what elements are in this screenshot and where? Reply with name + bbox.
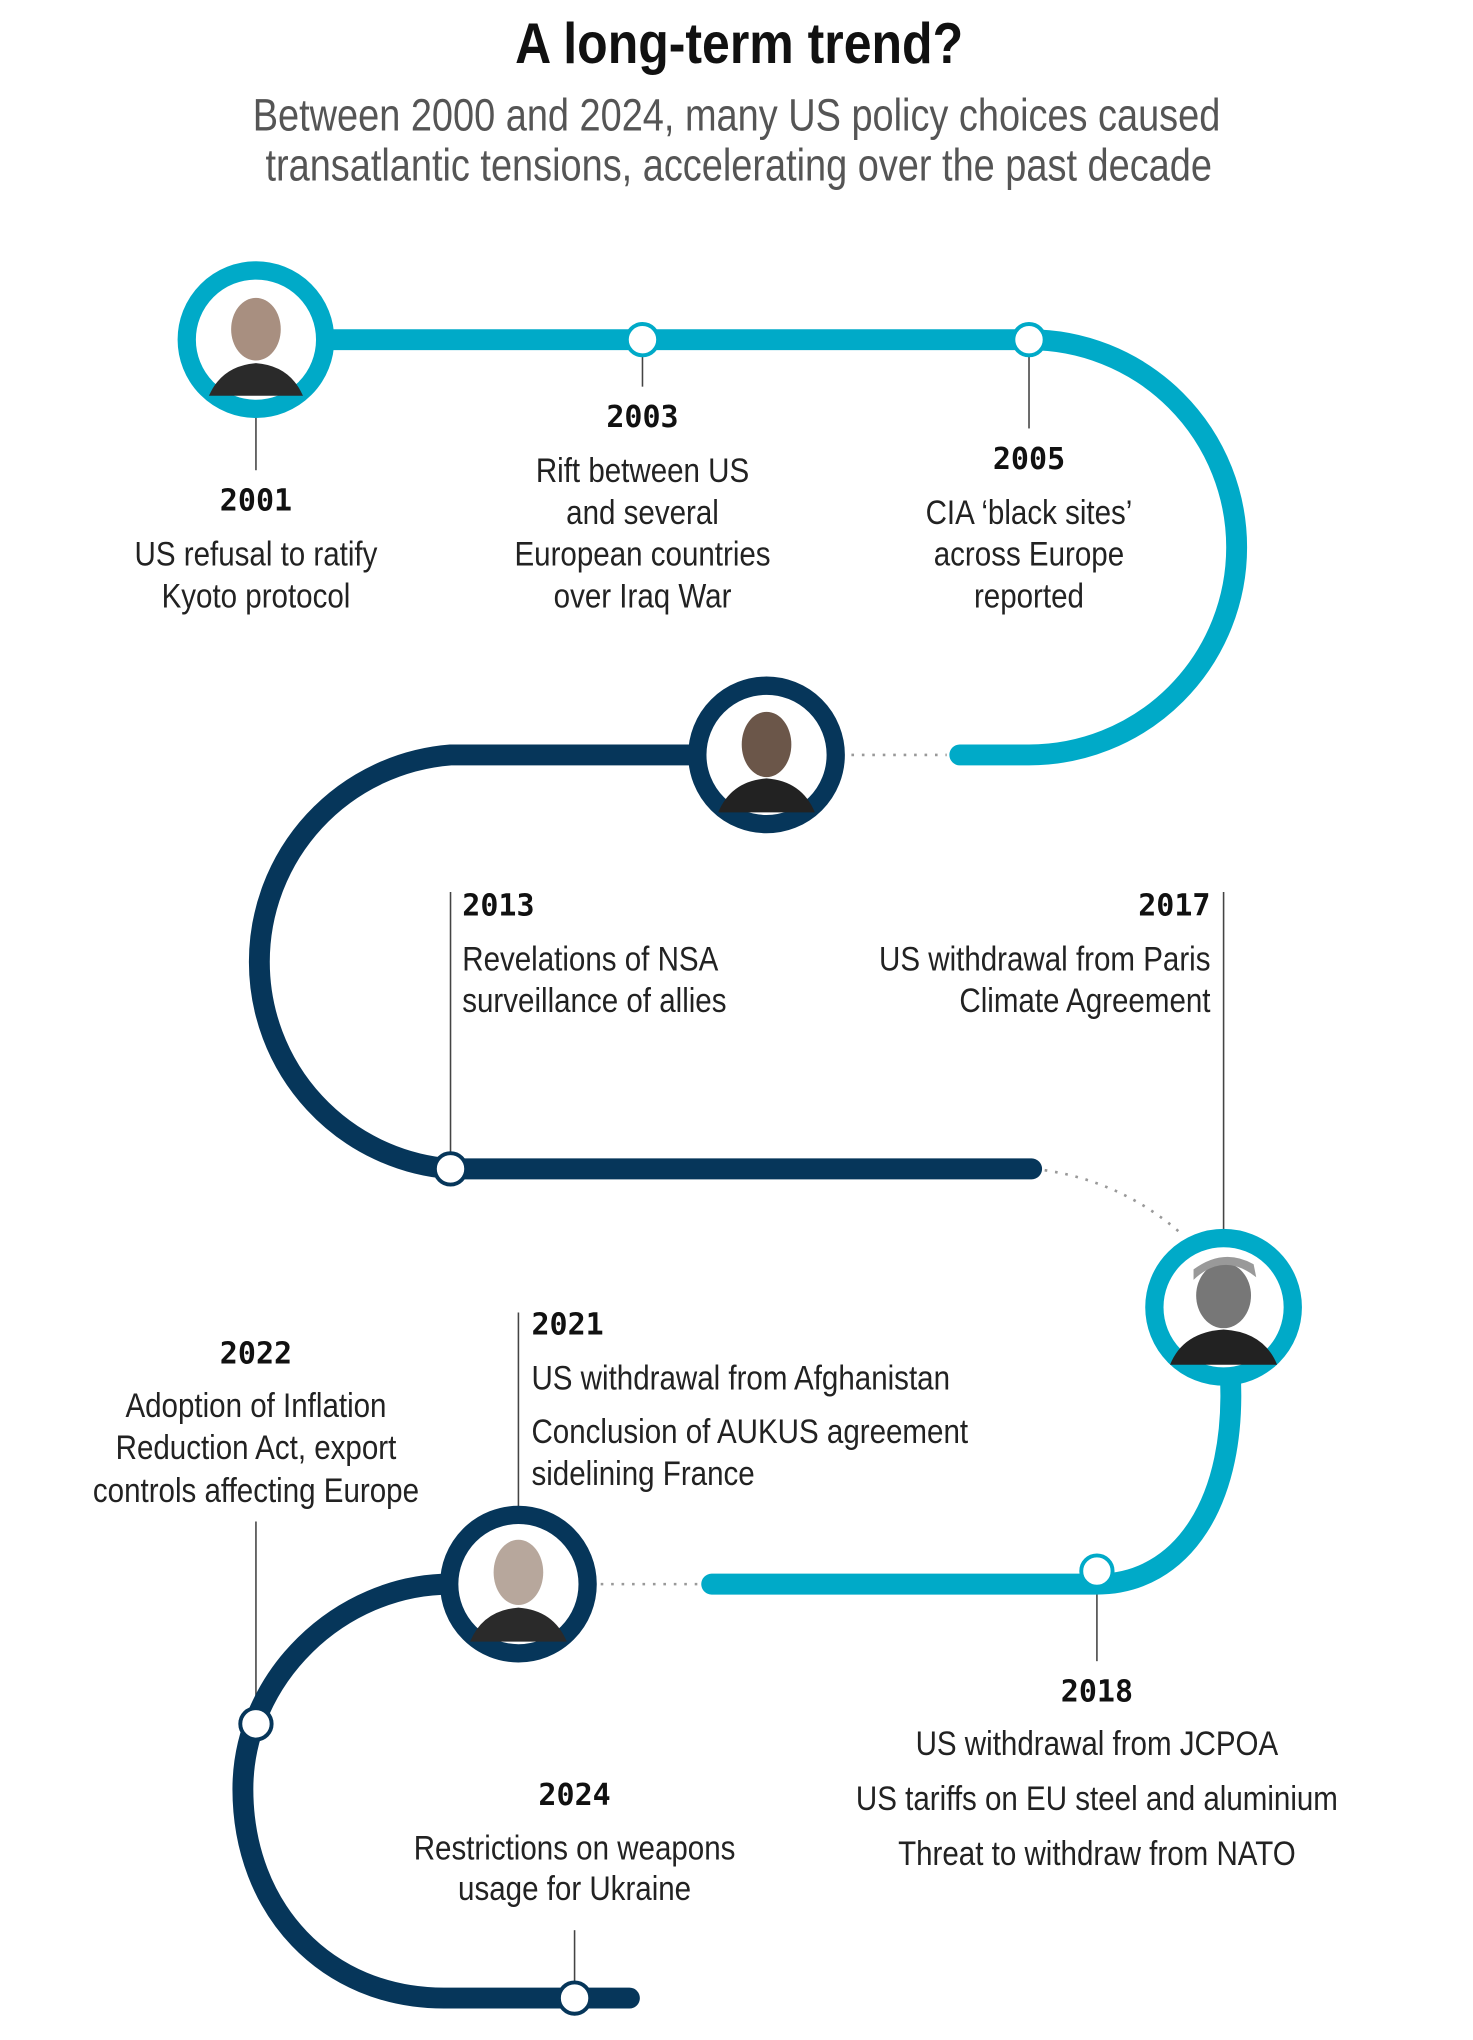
event 2001: Kyoto protocol — [162, 576, 350, 615]
event 2022: 2022 — [220, 1336, 292, 1371]
event 2021: Conclusion of AUKUS agreement — [531, 1412, 968, 1451]
event 2003: European countries — [514, 535, 771, 573]
timeline: Trump era (cyan) — [712, 1371, 1231, 1584]
subtitle: transatlantic tensions, accelerating over the past decade — [265, 139, 1212, 190]
event 2021: 2021 — [531, 1308, 604, 1343]
portrait: Obama — [697, 686, 836, 824]
event 2024: Restrictions on weapons — [414, 1829, 735, 1867]
event 2022 — [93, 1336, 419, 1509]
event 2022: Reduction Act, export — [116, 1428, 396, 1466]
event 2003: Rift between US — [536, 451, 749, 489]
event 2017: Climate Agreement — [959, 981, 1211, 1020]
event 2003: 2003 — [606, 400, 679, 435]
event 2013: 2013 — [462, 889, 535, 924]
event 2001: US refusal to ratify — [135, 535, 377, 573]
event 2005: 2005 — [993, 442, 1065, 477]
markers — [240, 324, 1113, 2014]
event 2003: over Iraq War — [554, 576, 732, 615]
event 2003 — [514, 400, 771, 615]
portrait: Bush — [187, 270, 325, 409]
event 2022: controls affecting Europe — [93, 1471, 419, 1509]
portrait: Biden — [449, 1515, 588, 1653]
event 2018 — [856, 1675, 1338, 1872]
timeline: Biden era (navy) — [243, 1584, 629, 1998]
event 2005 — [926, 442, 1132, 615]
subtitle — [253, 89, 1220, 190]
event 2013: Revelations of NSA — [462, 939, 719, 978]
event 2017: 2017 — [1138, 889, 1211, 924]
event 2018: Threat to withdraw from NATO — [898, 1834, 1296, 1872]
event 2018: 2018 — [1061, 1675, 1133, 1710]
event 2005: across Europe — [934, 535, 1124, 573]
event 2018: US tariffs on EU steel and aluminium — [856, 1779, 1338, 1818]
title: A long-term trend? — [515, 12, 963, 76]
event 2005: CIA ‘black sites’ — [926, 493, 1132, 531]
event 2017 — [879, 889, 1211, 1020]
dotted transitions — [601, 755, 1182, 1584]
event 2005: reported — [974, 576, 1084, 615]
event 2021: sidelining France — [531, 1454, 755, 1492]
timeline: Obama era (navy) — [259, 755, 1032, 1169]
event 2017: US withdrawal from Paris — [879, 939, 1211, 978]
event 2024 — [414, 1778, 735, 1908]
event 2018: US withdrawal from JCPOA — [916, 1724, 1279, 1763]
event 2013: surveillance of allies — [462, 981, 727, 1020]
subtitle: Between 2000 and 2024, many US policy choices caused — [253, 89, 1220, 141]
event 2001 — [135, 484, 377, 615]
timeline: Bush era (cyan) — [256, 340, 1237, 755]
event 2022: Adoption of Inflation — [125, 1386, 386, 1424]
event 2021 — [531, 1308, 968, 1492]
connector lines — [256, 355, 1224, 1982]
event 2013 — [462, 889, 727, 1020]
event 2001: 2001 — [220, 484, 292, 519]
event 2024: usage for Ukraine — [458, 1869, 691, 1908]
event 2003: and several — [566, 493, 719, 531]
portrait: Trump — [1154, 1238, 1293, 1376]
event 2021: US withdrawal from Afghanistan — [531, 1359, 950, 1397]
event 2024: 2024 — [538, 1778, 611, 1813]
